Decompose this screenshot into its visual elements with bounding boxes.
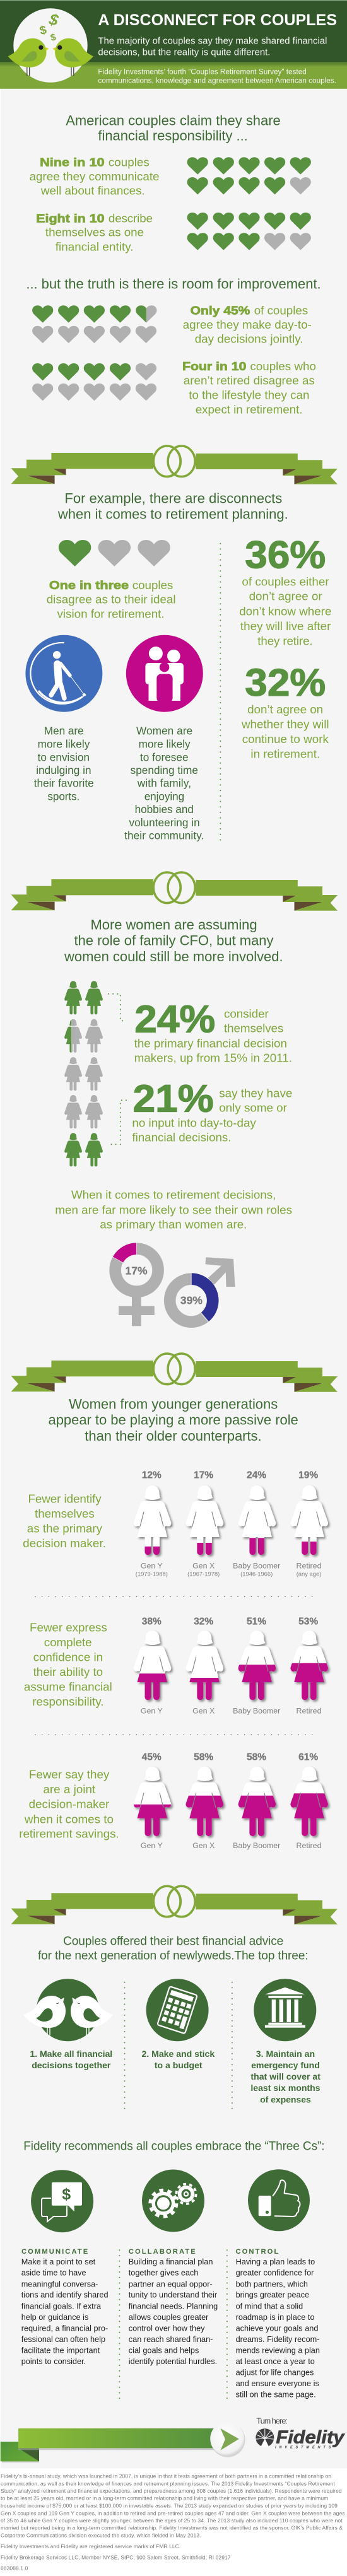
text: fewer identify	[23, 1492, 106, 1550]
footnote: Fidelity Brokerage Services LLC, Member NYSE, SIPC, 900 Salem Street, Smithfield, RI 02917	[1, 2554, 231, 2560]
ribbon divider with rings	[11, 446, 338, 484]
text: fewer identify: as the primary	[27, 1522, 103, 1535]
text: women are more likely: Women are	[136, 725, 192, 737]
chart: joint decision maker by generation: Retired	[297, 1841, 322, 1850]
stat: only 45 percent text: Only 45%	[191, 303, 250, 317]
column: communicate: COMMUNICATE	[21, 2248, 88, 2256]
stat: eight in 10 text: Eight in 10	[36, 211, 105, 225]
text: fewer say: decision-maker	[29, 1798, 109, 1811]
stat: 21 percent: financial decisions.	[132, 1131, 231, 1144]
stat: one in three text	[47, 578, 175, 621]
chart: joint decision maker by generation: 58%	[194, 1752, 213, 1763]
column: control: dreams. Fidelity recom-	[236, 2335, 319, 2344]
column: collaborate: allows couples greater	[129, 2313, 209, 2322]
heading: retirement planning disconnects: when it comes to retirement planning.	[57, 506, 288, 522]
text: fewer say: Fewer say they	[29, 1767, 110, 1781]
heading: younger generations: appear to be playing a more passive role	[48, 1412, 298, 1428]
text: women are more likely	[124, 725, 204, 842]
pictogram: women columns	[64, 981, 103, 1166]
stat: nine in 10 text: couples	[109, 155, 150, 168]
heading: three Cs: Fidelity recommends all couples embrace the “Three Cs”:	[23, 2140, 324, 2153]
chart: primary decision maker by generation: (1967-1978)	[187, 1570, 220, 1577]
stat: 21 percent	[132, 1077, 292, 1144]
stat: four in 10 text: aren’t retired disagree as	[184, 374, 315, 387]
heading: younger generations	[48, 1396, 298, 1444]
stat: four in 10 text: Four in 10	[182, 360, 246, 373]
subtitle: decisions, but the reality is quite different.	[98, 48, 270, 58]
text: retirement decisions	[55, 1188, 292, 1231]
stat: 32 percent: don’t agree on	[247, 703, 323, 716]
footnote: married but reported being in a long-term committed relationship. Fidelity Investments was not identified as the sponsor. GfK’s Public Affairs &	[1, 2525, 343, 2531]
ribbon divider with rings	[11, 872, 338, 911]
text: men are more likely: sports.	[47, 790, 79, 802]
text: fewer say: are a joint	[43, 1783, 96, 1796]
text: women are more likely: hobbies and	[135, 803, 194, 816]
hearts: 45 percent	[32, 305, 157, 343]
text: fewer say: when it comes to	[24, 1812, 114, 1825]
column: control: at least once a year to	[236, 2357, 315, 2366]
chart: primary decision maker by generation: 12%	[142, 1470, 162, 1480]
chart: joint decision maker by generation: Baby Boomer	[233, 1841, 280, 1850]
heading: retirement planning disconnects	[57, 490, 288, 522]
heading: best financial advice: for the next generation of newlyweds.The top three:	[38, 1950, 309, 1963]
hearts: eight of ten	[187, 213, 311, 250]
text: fewer identify: decision maker.	[23, 1537, 106, 1550]
chart: joint decision maker by generation: 58%	[247, 1752, 266, 1763]
stat: eight in 10 text: describe	[109, 211, 153, 225]
icon: golfer	[25, 635, 102, 712]
icon: thumbs up	[248, 2169, 310, 2231]
stat: eight in 10 text: themselves as one	[45, 226, 144, 239]
heading: women as family CFO: the role of family CFO, but many	[74, 933, 274, 949]
chart: male symbol donut 39 percent: 39%	[180, 1294, 203, 1307]
chart: joint decision maker by generation: 61%	[298, 1752, 318, 1763]
stat: 21 percent: 21%	[132, 1077, 214, 1120]
stat: 32 percent: in retirement.	[250, 747, 320, 761]
column: control: achieve your goals and	[236, 2324, 318, 2333]
text: men are more likely	[34, 725, 94, 802]
footnote: Fidelity’s bi-annual study, which was launched in 2007, is unique in that it tests agreement of both partners in a committed relationship on	[1, 2473, 331, 2479]
column: communicate: Make it a point to set	[21, 2257, 96, 2266]
icon: family	[126, 635, 203, 712]
stat: eight in 10 text	[36, 211, 153, 253]
column: control: roadmap is in place to	[236, 2313, 314, 2322]
text: fewer identify: themselves	[35, 1507, 95, 1520]
chart: confidence by generation: 38%	[142, 1616, 162, 1627]
text: men are more likely: Men are	[44, 725, 84, 737]
stat: eight in 10 text: financial entity.	[56, 240, 134, 253]
advice 3: least six months	[250, 2083, 321, 2093]
heading: women as family CFO: More women are assuming	[91, 917, 257, 933]
chart: confidence by generation: Gen Y	[141, 1707, 163, 1716]
column: communicate	[21, 2248, 109, 2366]
stat: 36 percent	[239, 534, 331, 648]
chart: confidence by generation: Retired	[297, 1707, 322, 1716]
stat: only 45 percent text: of couples	[254, 303, 308, 317]
hearts: one of three	[59, 540, 170, 566]
chart: female symbol donut 17 percent: 17%	[125, 1265, 148, 1277]
footnote: Gen X couples and 109 Gen Y couples, in addition to retired and pre-retired couples ages 47 and older. Gen X couples were between the ages	[1, 2510, 344, 2516]
chart: joint decision maker by generation	[134, 1752, 328, 1850]
column: communicate: points to consider.	[21, 2357, 86, 2366]
advice 1: decisions together	[32, 2060, 111, 2070]
stat: only 45 percent text: day decisions jointly.	[195, 332, 303, 346]
column: collaborate: cial goals and helps	[129, 2346, 199, 2355]
footnote: Corporate Communications division executed the study, which fielded in May 2013.	[1, 2532, 201, 2539]
column: control: brings greater peace	[236, 2291, 309, 2300]
stat: 36 percent: they will live after	[240, 619, 331, 633]
footnote	[1, 2473, 344, 2571]
text: fewer express: Fewer express	[30, 1620, 107, 1634]
stat: 32 percent: whether they will	[241, 717, 329, 730]
stat: nine in 10 text: well about finances.	[40, 184, 145, 197]
chart: confidence by generation: Gen X	[192, 1707, 215, 1716]
stat: 21 percent: no input into day-to-day	[132, 1116, 256, 1129]
advice 1: 1. Make all financial	[30, 2049, 112, 2059]
text: fewer say: retirement savings.	[19, 1827, 119, 1841]
column: collaborate: tunity to understand their	[129, 2291, 218, 2300]
column: communicate: tions and identify shared	[21, 2291, 109, 2300]
text: men are more likely: their favorite	[34, 777, 94, 790]
stat: 36 percent: of couples either	[242, 575, 329, 588]
text: women are more likely: more likely	[139, 738, 191, 751]
text: women are more likely: to foresee	[140, 751, 188, 763]
hearts: four of ten	[32, 363, 156, 401]
text: women are more likely: spending time	[131, 764, 198, 776]
icon: gears	[142, 2170, 204, 2232]
ribbon divider with rings	[11, 1354, 338, 1392]
chart: primary decision maker by generation: Retired	[297, 1562, 322, 1571]
logo: Fidelity Investments	[256, 2427, 346, 2449]
column: collaborate	[129, 2248, 218, 2366]
chart: confidence by generation: Baby Boomer	[233, 1707, 280, 1716]
column: control: greater confidence for	[236, 2269, 314, 2278]
stat: 24 percent: themselves	[224, 1022, 283, 1035]
chart: primary decision maker by generation: 24%	[247, 1470, 266, 1480]
stat: 24 percent	[134, 998, 292, 1065]
column: control: Having a plan leads to	[236, 2257, 315, 2266]
title: A DISCONNECT FOR COUPLES	[98, 11, 337, 29]
heading: women as family CFO	[64, 917, 283, 964]
heading: younger generations: Women from younger generations	[69, 1396, 278, 1412]
text: men are more likely: more likely	[38, 738, 90, 751]
icon: bank	[254, 1979, 316, 2041]
column: collaborate: COLLABORATE	[129, 2248, 196, 2256]
chart: confidence by generation: 51%	[247, 1616, 266, 1627]
column: control: CONTROL	[236, 2248, 278, 2256]
subtitle	[98, 37, 327, 58]
chart: confidence by generation	[134, 1616, 328, 1716]
heading: best financial advice	[38, 1935, 309, 1963]
advice 2	[141, 2049, 215, 2070]
chart: primary decision maker by generation: 17%	[194, 1470, 213, 1480]
logo: Fidelity Investments: INVESTMENTS	[275, 2445, 331, 2449]
text: fewer express: assume financial	[24, 1680, 112, 1694]
text: men are more likely: to envision	[38, 751, 90, 763]
heading: room for improvement: ... but the truth is there is room for improvement.	[26, 276, 321, 291]
text: women are more likely: enjoying	[144, 790, 184, 802]
text: fewer express: responsibility.	[32, 1695, 104, 1708]
advice 3	[250, 2049, 321, 2104]
heading: couples claim	[66, 112, 281, 144]
stat: one in three text: disagree as to their ideal	[47, 593, 175, 606]
advice 2: 2. Make and stick	[141, 2049, 215, 2059]
chart: primary decision maker by generation: (1979-1988)	[136, 1570, 168, 1577]
heading: retirement planning disconnects: For example, there are disconnects	[64, 490, 282, 506]
text: turn here: Turn here:	[256, 2416, 288, 2426]
stat: four in 10 text	[182, 360, 316, 416]
stat: 21 percent: say they have	[219, 1086, 292, 1099]
stat: 36 percent: don’t agree or	[249, 590, 322, 603]
column: collaborate: Building a financial plan	[129, 2257, 213, 2266]
text: women are more likely: volunteering in	[129, 816, 200, 829]
stat: 36 percent: 36%	[245, 534, 326, 577]
text: fewer identify: Fewer identify	[28, 1492, 102, 1506]
text: fewer express	[24, 1620, 112, 1708]
heading: younger generations: than their older counterparts.	[85, 1428, 262, 1444]
icon: love birds with dollar signs: $	[47, 10, 61, 30]
stat: one in three text: couples	[132, 578, 173, 592]
text: women are more likely: with family,	[137, 777, 191, 790]
survey description: communications, knowledge and agreement between American couples.	[98, 77, 336, 85]
stat: four in 10 text: expect in retirement.	[196, 402, 303, 416]
logo: Fidelity Investments: Fidelity	[276, 2427, 346, 2447]
stat: four in 10 text: couples who	[250, 360, 316, 373]
footnote: household income of $75,000 or at least $100,000 in investable assets. The 2013 study expanded on studies of prior years by including 109	[1, 2503, 338, 2509]
column: control: adjust for life changes	[236, 2368, 314, 2377]
stat: only 45 percent text	[183, 303, 312, 346]
footnote: Fidelity Investments and Fidelity are registered service marks of FMR LLC.	[1, 2543, 180, 2550]
text: fewer express: confidence in	[33, 1651, 103, 1664]
advice 2: to a budget	[155, 2060, 203, 2070]
column: collaborate: identify potential hurdles.	[129, 2357, 217, 2366]
text: fewer say	[19, 1767, 119, 1841]
column: control: of mind that a solid	[236, 2302, 303, 2310]
footnote: Study” analyzed retirement and financial expectations, and preparedness among 808 couples (1,616 individuals). Respondents were required	[1, 2488, 342, 2494]
heading: couples claim: American couples claim they share	[66, 112, 281, 128]
text: fewer express: complete	[44, 1636, 92, 1649]
footnote: communication, as well as their knowledge of finances and retirement planning issues. The 2013 Fidelity Investments “Couples Retirement	[1, 2480, 335, 2486]
stat: 36 percent: they retire.	[257, 635, 313, 648]
header banner	[0, 0, 347, 89]
stat: one in three text: One in three	[49, 578, 129, 592]
stat: 24 percent: the primary financial decision	[134, 1036, 287, 1050]
stat: nine in 10 text	[30, 155, 159, 197]
chart: confidence by generation: 32%	[194, 1616, 213, 1627]
icon: chat bubbles	[31, 2170, 93, 2232]
column: control: mends reviewing a plan	[236, 2346, 320, 2355]
stat: 21 percent: only some or	[219, 1101, 287, 1115]
heading: best financial advice: Couples offered their best financial advice	[63, 1935, 283, 1948]
column: control	[236, 2248, 320, 2399]
column: collaborate: partner an equal oppor-	[129, 2280, 213, 2288]
stat: 24 percent: makers, up from 15% in 2011.	[134, 1051, 292, 1065]
column: control: both partners, which	[236, 2280, 308, 2288]
subtitle: The majority of couples say they make shared financial	[98, 37, 327, 47]
icon: white love birds	[23, 1979, 113, 2041]
call to action ribbon with arrow	[1, 2421, 245, 2462]
footnote: 663088.1.0	[1, 2565, 28, 2571]
chart: female symbol donut 17 percent	[112, 1243, 158, 1326]
chart: primary decision maker by generation: (1946-1966)	[240, 1570, 273, 1577]
text: women are more likely: their community.	[124, 829, 204, 842]
column: communicate: financial goals. If extra	[21, 2302, 102, 2310]
column: communicate: required, a financial pro-	[21, 2324, 108, 2333]
chart: primary decision maker by generation	[134, 1470, 328, 1577]
chart: confidence by generation: 53%	[298, 1616, 318, 1627]
icon: chat bubbles: $	[62, 2186, 71, 2203]
chart: joint decision maker by generation: Gen Y	[141, 1841, 163, 1850]
heading: women as family CFO: women could still be more involved.	[64, 949, 283, 964]
chart: primary decision maker by generation: Baby Boomer	[233, 1562, 280, 1571]
chart: primary decision maker by generation: (any age)	[297, 1570, 321, 1577]
column: collaborate: control over how they	[129, 2324, 205, 2333]
chart: joint decision maker by generation: 45%	[142, 1752, 162, 1763]
icon: love birds with dollar signs	[8, 8, 93, 83]
survey description	[98, 68, 336, 85]
stat: nine in 10 text: agree they communicate	[30, 170, 159, 183]
advice 3: of expenses	[260, 2094, 311, 2104]
column: control: still on the same page.	[236, 2391, 316, 2399]
advice 3: 3. Maintain an	[256, 2049, 315, 2059]
stat: nine in 10 text: Nine in 10	[40, 155, 105, 168]
icon: calculator	[146, 1979, 209, 2041]
icon: love birds with dollar signs: $	[38, 23, 49, 38]
column: collaborate: together gives each	[129, 2269, 198, 2278]
icon: love birds with dollar signs: $	[49, 32, 57, 44]
footnote: to be at least 25 years old, married or in a long-term committed relationship and living with their respective partner, and have a minimum	[1, 2495, 328, 2502]
heading: couples claim: financial responsibility ...	[98, 128, 248, 144]
chart: male symbol donut 39 percent	[170, 1257, 235, 1322]
survey description: Fidelity Investments’ fourth “Couples Retirement Survey” tested	[98, 68, 307, 76]
text: men are more likely: indulging in	[36, 764, 91, 776]
text: retirement decisions: When it comes to retirement decisions,	[71, 1188, 276, 1202]
stat: only 45 percent text: agree they make day-to-	[183, 318, 312, 331]
column: communicate: meaningful conversa-	[21, 2280, 98, 2288]
column: communicate: facilitate the important	[21, 2346, 100, 2355]
stat: 32 percent: 32%	[245, 661, 326, 704]
stat: 36 percent: don’t know where	[239, 604, 331, 618]
footnote: of 35 to 46 while Gen Y couples were slightly younger, between the ages of 25 to 34. The 2013 study also included 110 couples who were not	[1, 2517, 343, 2524]
stat: 32 percent: continue to work	[242, 732, 329, 746]
advice 3: that will cover at	[250, 2071, 321, 2081]
text: retirement decisions: men are far more likely to see their own roles	[55, 1203, 292, 1216]
ribbon divider with rings	[11, 1886, 338, 1924]
chart: primary decision maker by generation: Gen X	[192, 1562, 215, 1571]
stat: 24 percent: 24%	[134, 998, 215, 1041]
advice 3: emergency fund	[251, 2060, 320, 2070]
column: collaborate: financial needs. Planning	[129, 2302, 218, 2310]
stat: four in 10 text: to the lifestyle they can	[189, 388, 309, 401]
hearts: nine of ten	[187, 157, 311, 194]
column: communicate: fessional can often help	[21, 2335, 105, 2344]
text: fewer express: their ability to	[33, 1665, 103, 1678]
chart: primary decision maker by generation: Gen Y	[141, 1562, 163, 1571]
column: communicate: aside time to have	[21, 2269, 86, 2278]
advice 1	[30, 2049, 112, 2070]
text: retirement decisions: as primary than women are.	[100, 1218, 247, 1231]
column: control: and ensure everyone is	[236, 2379, 319, 2388]
stat: 24 percent: consider	[224, 1007, 269, 1020]
chart: joint decision maker by generation: Gen X	[192, 1841, 215, 1850]
chart: primary decision maker by generation: 19%	[298, 1470, 318, 1480]
stat: one in three text: vision for retirement.	[57, 607, 165, 621]
stat: 32 percent	[241, 661, 329, 761]
column: collaborate: can reach shared finan-	[129, 2335, 213, 2344]
column: communicate: help or guidance is	[21, 2313, 88, 2322]
